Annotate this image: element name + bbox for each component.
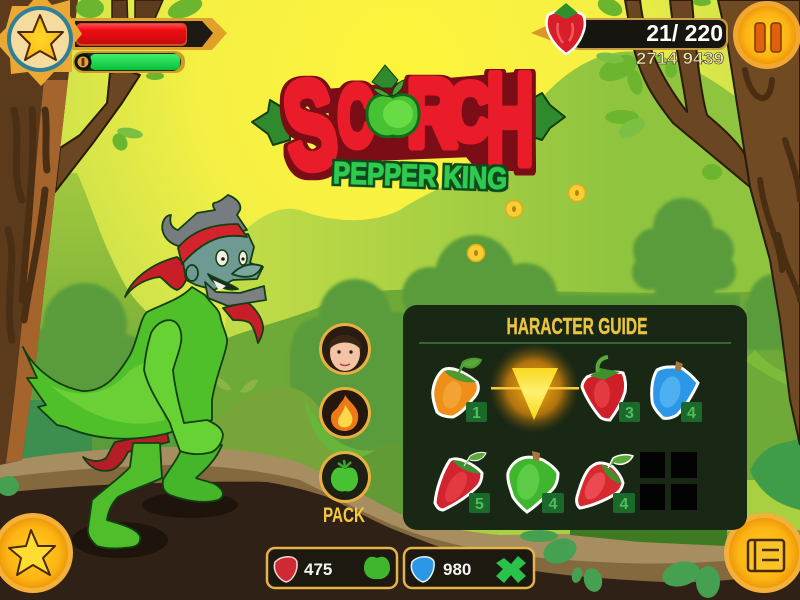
panel: resource blue pepper: [404, 548, 534, 588]
background: foreground bushes: [205, 350, 800, 525]
HUD: score digits: 2714 9439: [636, 49, 724, 68]
character: front leg: [88, 443, 162, 548]
badge: 4: [613, 493, 635, 513]
badge: 1: 1: [472, 405, 481, 422]
character: nose: [232, 264, 262, 277]
ground: dirt path and soil: [0, 447, 800, 600]
pepper: red hot: [577, 455, 633, 508]
logo: word Scorch: S: [276, 54, 344, 198]
button: pause: [733, 1, 800, 69]
character: back leg: [163, 445, 223, 502]
button: star: [0, 513, 73, 593]
badge: 4: 4: [549, 496, 558, 513]
icon: red pepper: [547, 3, 585, 54]
logo: word Scorch: C: [338, 69, 374, 163]
empty slots: [640, 452, 697, 510]
background: jungle hills: [0, 52, 800, 480]
pepper: red: [582, 357, 626, 420]
badge: 5: [469, 493, 490, 513]
icon: apple pack: [319, 451, 371, 503]
badge: 1: [466, 402, 487, 422]
character: green pepper king: [23, 195, 266, 548]
ground leaves: [0, 476, 720, 598]
HUD: health bar: [72, 18, 227, 50]
value: 475: 475: [304, 560, 332, 579]
logo: word Scorch: R: [407, 60, 457, 167]
icon: green cross: [496, 556, 526, 583]
button: guide book: [724, 513, 800, 593]
character: jaw: [205, 282, 266, 306]
leaves on trees: [76, 0, 722, 180]
character: arm: [144, 320, 223, 454]
logo: word Scorch: H: [486, 46, 534, 192]
tree: right trunk and branches: [625, 0, 800, 445]
badge: 3: 3: [625, 405, 634, 422]
pepper: red chili: [435, 452, 486, 510]
icon: apple: [364, 557, 390, 579]
icon: blue pepper: [411, 557, 434, 582]
icon: face avatar: [319, 323, 371, 375]
character: body shading: [50, 360, 165, 424]
badge: 3: [619, 402, 640, 422]
badge: 4: [542, 493, 564, 513]
character: body and tail: [23, 287, 227, 439]
character: helmet and horns: [162, 195, 247, 246]
icon: red pepper: [274, 557, 297, 582]
badge: 5: 5: [475, 496, 484, 513]
coins: [468, 184, 586, 262]
pepper: blue: [652, 361, 698, 418]
HUD: pepper counter: [531, 3, 728, 54]
badge: 4: 4: [687, 405, 696, 422]
logo: Scorch Pepper King: [252, 46, 565, 198]
badge: 4: [681, 402, 702, 422]
character: teeth: [213, 280, 226, 291]
pepper: orange: [433, 359, 481, 417]
HUD: star badge: [0, 0, 82, 86]
label: pack: PACK: [323, 504, 365, 527]
icon: flame: [319, 387, 371, 439]
character: mouth: [208, 274, 238, 290]
character: red scarf: [125, 257, 187, 297]
character: face: [183, 234, 263, 290]
logo: word Scorch: [276, 46, 534, 198]
character: loincloth: [83, 432, 169, 471]
character: eyes: [216, 250, 247, 266]
badge: 4: 4: [620, 496, 629, 513]
counter value: 21/ 220: [646, 20, 723, 46]
HUD: stamina bar: [73, 51, 185, 73]
pepper: green: [508, 451, 558, 512]
logo: side leaves: [252, 93, 565, 145]
logo: Pepper King subtitle: PEPPER KING: [333, 155, 508, 196]
logo: apple O: [367, 65, 419, 137]
character: ear: [186, 265, 198, 281]
character: red headband: [178, 224, 247, 264]
panel: character guide: [403, 305, 747, 530]
glow triangle selection: [489, 343, 579, 433]
tree: left trunk and branches: [0, 0, 163, 465]
panel: resource red pepper: [267, 548, 397, 588]
logo: word Scorch: C: [447, 67, 491, 156]
value: 980: 980: [443, 560, 471, 579]
heading: character guide: HARACTER GUIDE: [506, 313, 648, 339]
